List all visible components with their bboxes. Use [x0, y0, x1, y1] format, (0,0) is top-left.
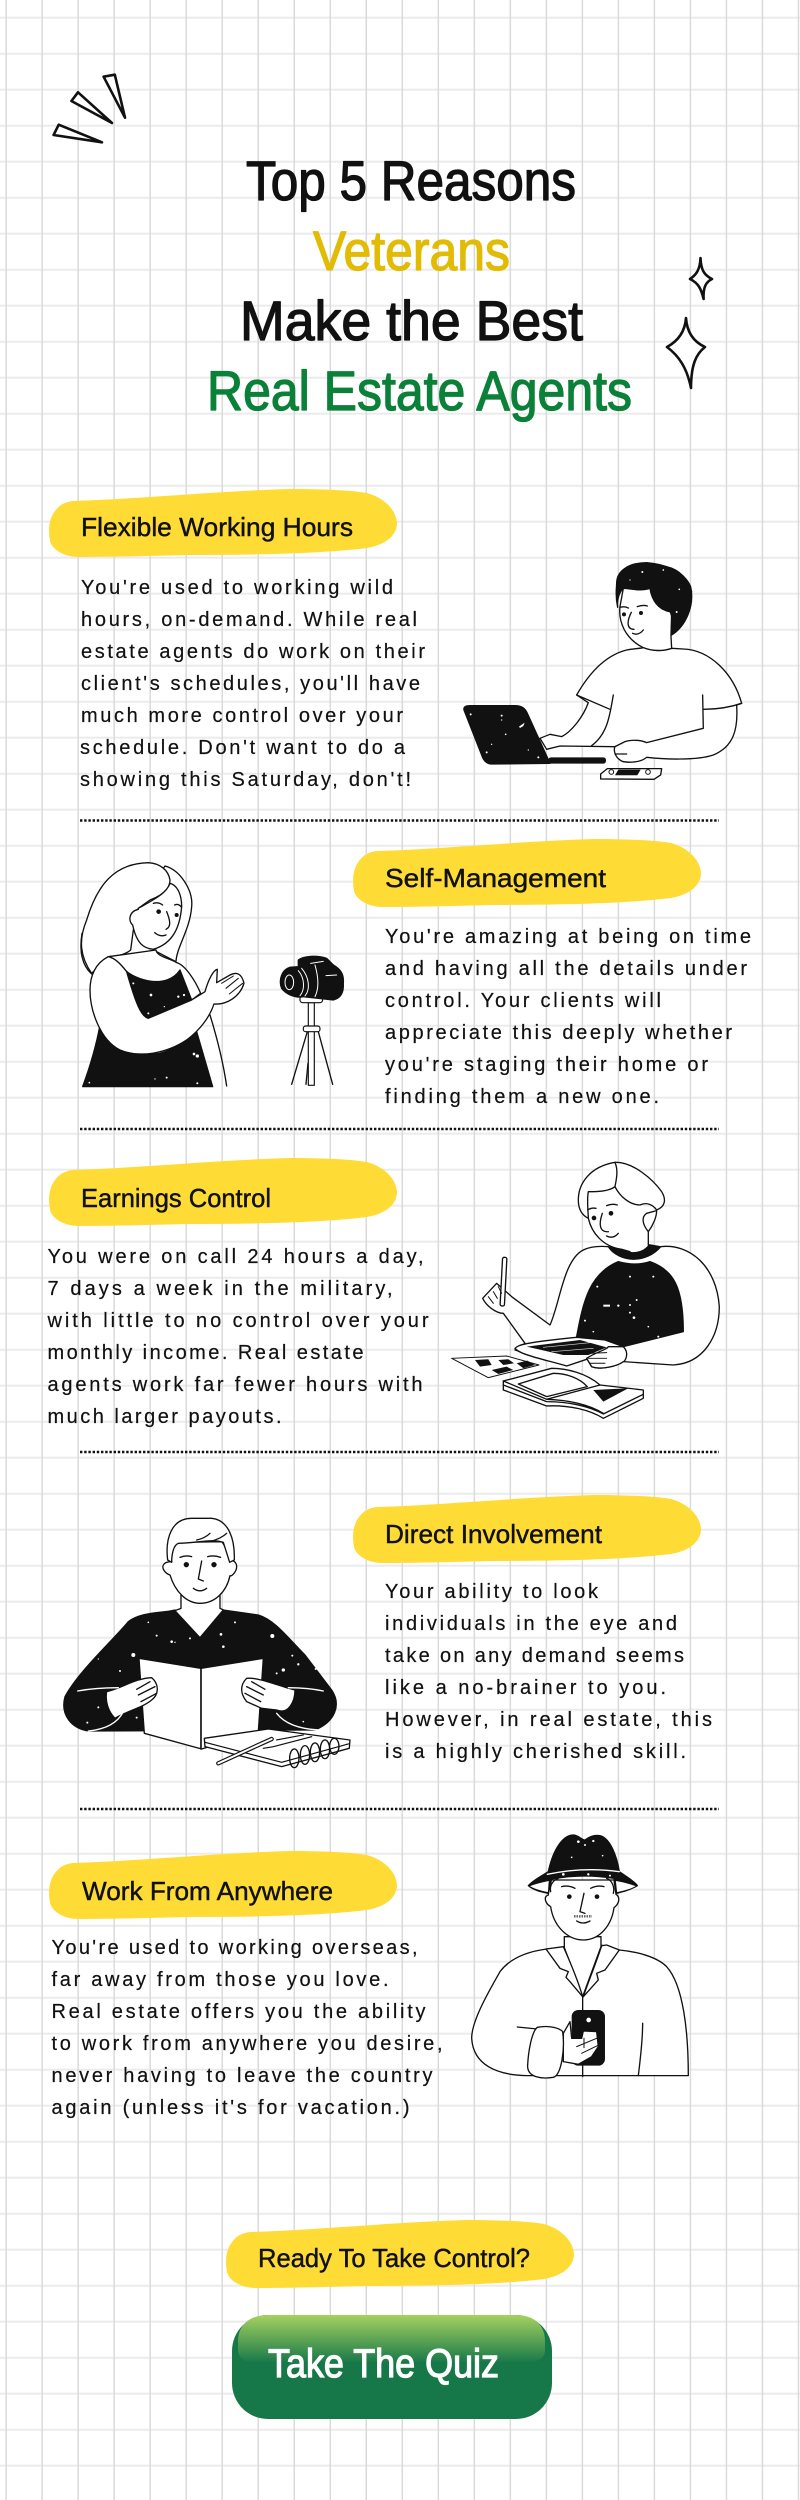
body text: you're staging their home or	[385, 1054, 708, 1076]
section 2: Self-Management	[81, 839, 751, 1108]
body text: Your ability to look	[385, 1581, 599, 1603]
body text: monthly income. Real estate	[48, 1342, 364, 1364]
body text: much larger payouts.	[48, 1406, 282, 1428]
body text: again (unless it's for vacation.)	[52, 2097, 410, 2119]
quiz button: Take The Quiz	[268, 2342, 499, 2386]
illustration: man at laptop	[464, 563, 742, 779]
section 5: Work From Anywhere	[49, 1835, 688, 2119]
title: Top 5 Reasons	[246, 149, 576, 212]
heading banner	[353, 1495, 701, 1563]
heading banner: Flexible Working Hours	[81, 512, 353, 542]
section 3: Earnings Control	[46, 1158, 719, 1428]
heading banner	[49, 1158, 397, 1226]
body text: appreciate this deeply whether	[385, 1022, 732, 1044]
call to action banner: Ready To Take Control?	[258, 2243, 530, 2273]
body text: finding them a new one.	[385, 1086, 659, 1108]
body text: to work from anywhere you desire,	[52, 2033, 442, 2055]
illustration: man in hat with phone	[472, 1835, 688, 2078]
title	[207, 149, 632, 422]
heading banner: Work From Anywhere	[82, 1876, 333, 1906]
body text: You're amazing at being on time	[385, 926, 751, 948]
body text: You were on call 24 hours a day,	[48, 1246, 424, 1268]
body text: agents work far fewer hours with	[48, 1374, 422, 1396]
section 4: Direct Involvement	[64, 1495, 712, 1768]
heading banner	[49, 1851, 397, 1919]
body text: showing this Saturday, don't!	[80, 769, 411, 791]
illustration: person with tablet and magazines	[452, 1162, 719, 1418]
divider	[80, 1808, 719, 1810]
body text: estate agents do work on their	[81, 641, 425, 663]
divider	[80, 1451, 719, 1453]
body text: take on any demand seems	[385, 1645, 684, 1667]
body text	[52, 1937, 442, 2119]
title: Veterans	[313, 219, 510, 282]
body text: schedule. Don't want to do a	[80, 737, 406, 759]
heading banner	[353, 839, 701, 907]
body text: is a highly cherished skill.	[385, 1741, 686, 1763]
illustration: woman and camera on tripod	[81, 863, 343, 1087]
body text: never having to leave the country	[52, 2065, 432, 2087]
illustration: man reading book	[64, 1518, 350, 1768]
body text: client's schedules, you'll have	[81, 673, 420, 695]
body text: You're used to working overseas,	[52, 1937, 418, 1959]
body text: You're used to working wild	[81, 577, 393, 599]
body text: control. Your clients will	[385, 990, 661, 1012]
body text: Real estate offers you the ability	[52, 2001, 426, 2023]
divider	[80, 1128, 719, 1130]
body text	[80, 577, 425, 791]
section 1: Flexible Working Hours	[49, 489, 742, 791]
heading banner	[49, 489, 397, 557]
body text: individuals in the eye and	[385, 1613, 677, 1635]
heading banner: Earnings Control	[81, 1183, 271, 1213]
divider	[80, 819, 719, 822]
heading banner: Self-Management	[385, 863, 607, 893]
body text: 7 days a week in the military,	[48, 1278, 393, 1300]
body text: with little to no control over your	[46, 1310, 429, 1332]
title: Real Estate Agents	[207, 359, 632, 422]
decoration: burst of three spikes	[54, 75, 125, 142]
body text: hours, on-demand. While real	[81, 609, 417, 631]
body text	[46, 1246, 429, 1428]
heading banner: Direct Involvement	[385, 1519, 603, 1549]
body text: like a no-brainer to you.	[385, 1677, 666, 1699]
body text: far away from those you love.	[52, 1969, 388, 1991]
body text	[385, 926, 751, 1108]
title: Make the Best	[240, 289, 583, 352]
body text: and having all the details under	[385, 958, 747, 980]
body text	[385, 1581, 712, 1763]
body text: However, in real estate, this	[385, 1709, 712, 1731]
call to action banner	[226, 2220, 574, 2288]
decoration: sparkles	[667, 258, 712, 388]
quiz button	[232, 2315, 552, 2419]
body text: much more control over your	[81, 705, 403, 727]
